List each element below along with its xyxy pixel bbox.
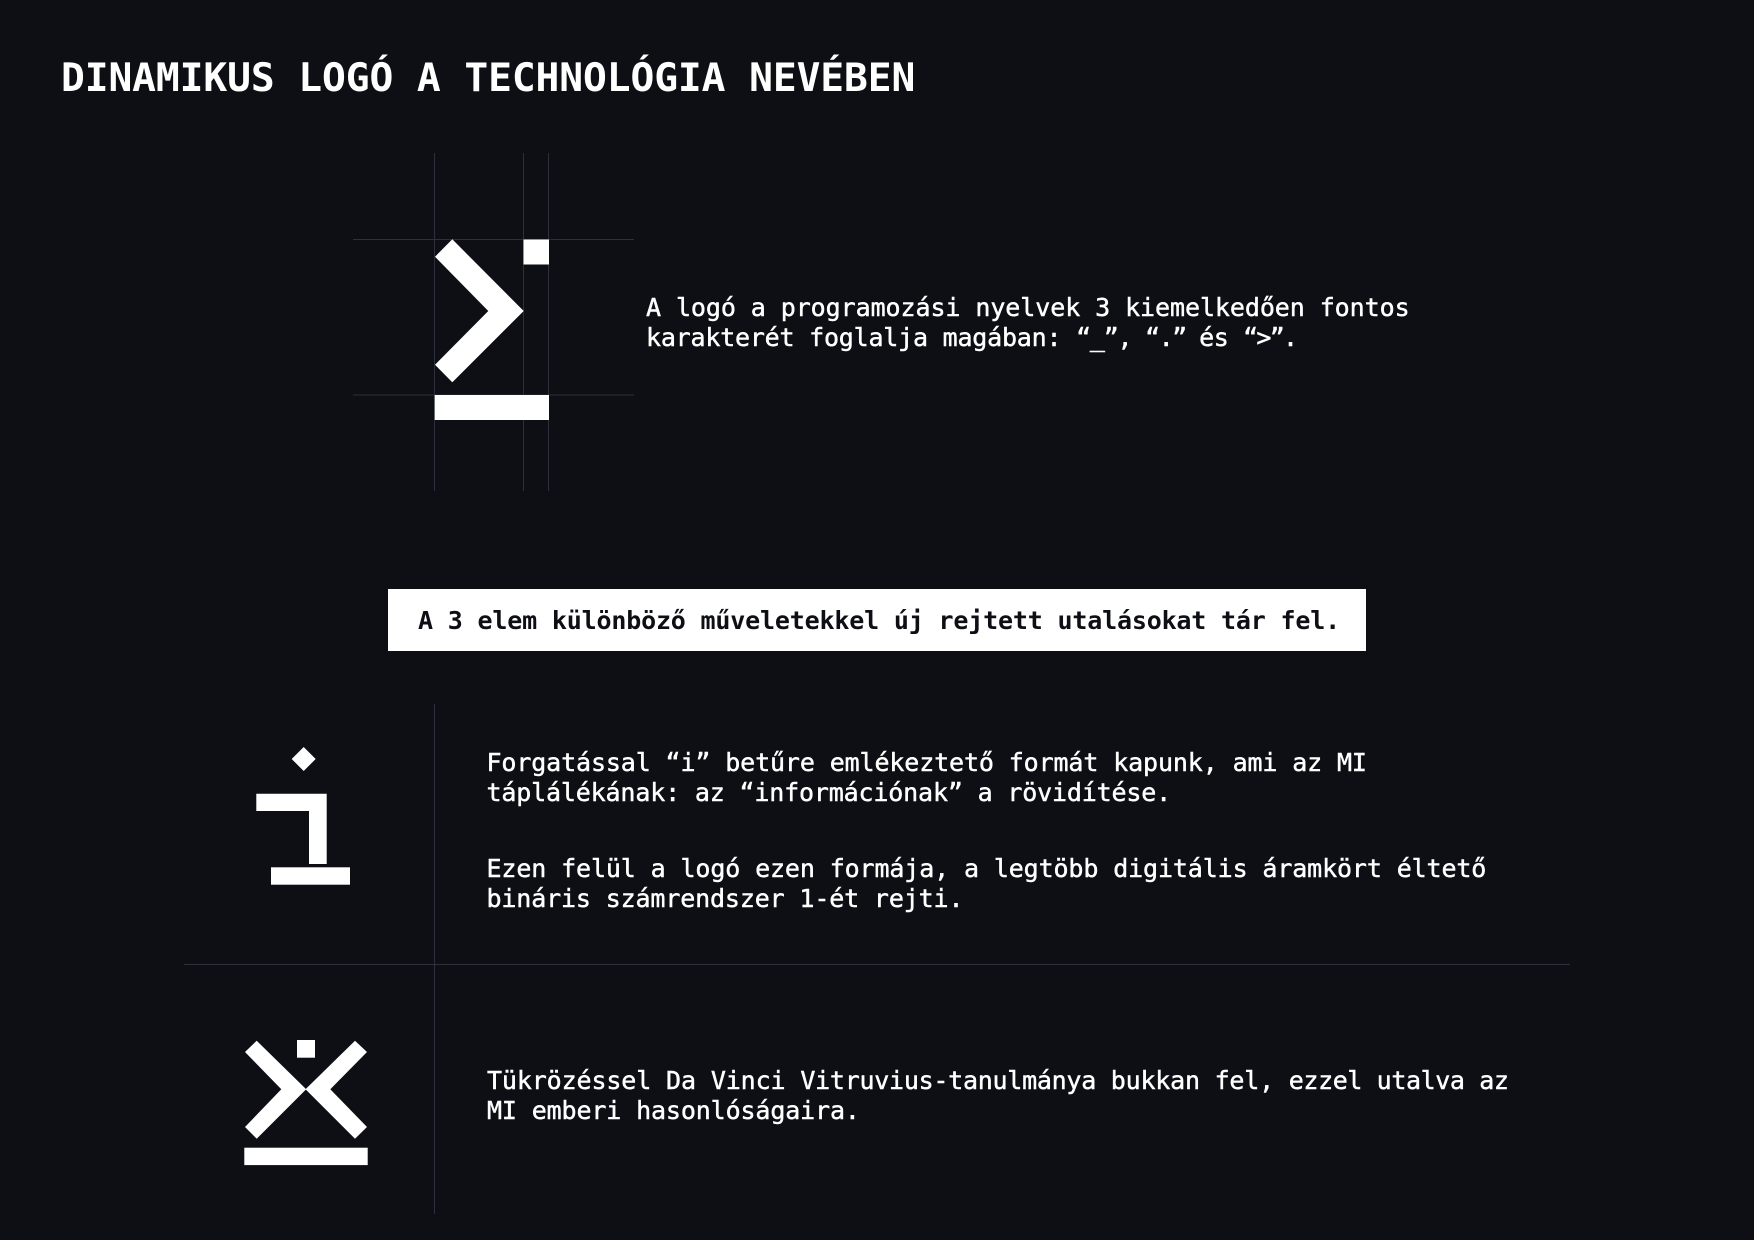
text: mirroring, Vitruvius: Tükrözéssel Da Vinci Vitruvius-tanulmánya bukkan fel, ezzel utalva az xyxy=(487,1066,1509,1094)
title: DINAMIKUS LOGÓ A TECHNOLÓGIA NEVÉBEN xyxy=(61,55,915,101)
text: logo description: karakterét foglalja magában: “_”, “.” és “>”. xyxy=(646,323,1296,352)
callout text: A 3 elem különböző műveletekkel új rejtett utalásokat tár fel. xyxy=(418,606,1340,634)
text: logo description: A logó a programozási nyelvek 3 kiemelkedően fontos xyxy=(646,293,1410,322)
text: rotation, letter i xyxy=(486,748,1367,807)
text: rotation, letter i: Forgatással “i” betűre emlékeztető formát kapunk, ami az MI xyxy=(486,748,1367,777)
text: binary 1 xyxy=(486,854,1486,913)
text: mirroring, Vitruvius: MI emberi hasonlóságaira. xyxy=(487,1096,860,1124)
text: rotation, letter i: táplálékának: az “információnak” a rövidítése. xyxy=(486,778,1171,807)
text: logo description xyxy=(646,293,1410,352)
text: binary 1: Ezen felül a logó ezen formája, a legtöbb digitális áramkört éltető xyxy=(486,854,1486,883)
text: mirroring, Vitruvius xyxy=(487,1066,1509,1124)
callout xyxy=(388,589,1366,651)
text: binary 1: bináris számrendszer 1-ét rejti. xyxy=(486,884,963,913)
